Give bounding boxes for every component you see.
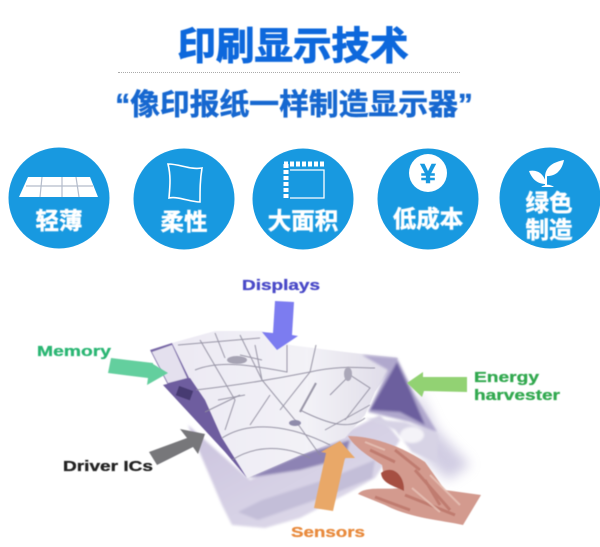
icon: hand — [348, 436, 481, 525]
right corner fold — [362, 355, 438, 462]
panel: feature icons — [8, 148, 600, 250]
arrow: sensors — [314, 441, 355, 511]
label: displays: Displays — [242, 278, 320, 294]
map surface — [172, 331, 398, 478]
feature: low cost: 低成本 — [393, 206, 463, 232]
left folded edge — [150, 343, 247, 478]
subtitle: “像印报纸一样制造显示器” — [115, 88, 473, 122]
label: energy harvester — [474, 370, 560, 404]
arrow: displays — [262, 301, 298, 350]
arrow: memory — [108, 358, 168, 385]
label: energy harvester: Energy — [474, 370, 539, 386]
illustration: flexible printed sheet — [150, 331, 470, 528]
feature: lightweight: 轻薄 — [36, 208, 82, 234]
feature: flexible: 柔性 — [160, 209, 208, 235]
title: 印刷显示技术 — [177, 26, 409, 68]
feature: large area — [252, 148, 354, 250]
arrow: driver ICs — [149, 429, 205, 465]
feature: lightweight — [8, 148, 110, 248]
feature: low cost — [378, 148, 478, 250]
label: sensors: Sensors — [291, 525, 365, 541]
label: driver ICs: Driver ICs — [63, 459, 153, 475]
feature: flexible — [134, 148, 234, 250]
feature: green manufacturing: 制造 — [526, 217, 573, 243]
feature: large area: 大面积 — [268, 208, 338, 234]
feature: low cost: ¥ — [420, 158, 436, 189]
label: energy harvester: harvester — [474, 388, 560, 404]
feature: green manufacturing — [500, 148, 600, 248]
map lines — [178, 333, 375, 460]
label: memory: Memory — [37, 344, 111, 360]
feature: green manufacturing: 绿色 — [526, 190, 572, 216]
arrow: energy harvester — [407, 372, 467, 397]
lower sheet — [188, 415, 400, 528]
